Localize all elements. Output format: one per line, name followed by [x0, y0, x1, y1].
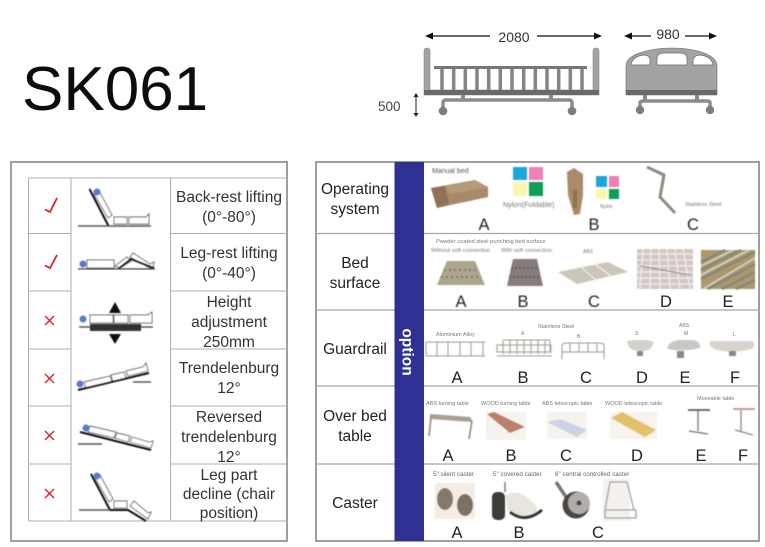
option B: stainless folding rail: A	[521, 331, 525, 337]
option D: wood telescopic table: WOOD telescopic table	[605, 401, 662, 407]
option A: manual bed foldable handle	[431, 167, 555, 234]
option C: central controlled caster: 6" central controlled caster	[555, 471, 629, 478]
row: over bed table	[323, 396, 755, 465]
option C: stainless rail	[562, 334, 604, 387]
row heading: system	[330, 201, 380, 218]
option F: ABS rail large	[710, 332, 754, 387]
label: (0°-40°)	[202, 265, 256, 282]
option D: grid surface	[637, 249, 693, 311]
option vertical band	[394, 162, 424, 541]
option D: ABS rail small: S	[635, 331, 639, 337]
bed side view diagram	[378, 29, 602, 117]
row heading: Caster	[332, 495, 378, 512]
label: Back-rest lifting	[176, 189, 282, 206]
row: caster	[332, 471, 636, 542]
icon: back-rest lifted bed	[78, 188, 151, 226]
row: height adjustment	[45, 294, 268, 351]
length dimension 2080: 2080	[498, 29, 530, 45]
option E: striped surface: E	[722, 293, 734, 311]
bed side drawing	[424, 48, 599, 115]
option F: moveable table	[733, 409, 755, 465]
bed head view diagram	[624, 26, 717, 114]
option C: ABS surface: ABS	[583, 249, 594, 255]
positions table grid	[28, 178, 287, 521]
label: Trendelenburg	[179, 360, 279, 377]
option F: moveable table: F	[738, 447, 748, 465]
icon: leg-rest lifted bed	[78, 253, 155, 269]
option C: stainless steel crank	[647, 167, 721, 234]
row: leg part decline	[45, 467, 275, 522]
option A: surface without soft connection	[431, 248, 490, 311]
option B: covered caster: B	[513, 524, 525, 542]
option B: wood turning table: B	[505, 447, 517, 465]
option A: ABS turning table	[426, 401, 473, 465]
option A: ABS turning table: A	[442, 447, 454, 465]
row heading: table	[338, 428, 372, 445]
cross mark	[45, 431, 54, 440]
option B: nylon handle	[567, 168, 619, 234]
option A: manual bed foldable handle: Manual bed	[432, 168, 469, 175]
option vertical band: option	[398, 328, 416, 376]
width dimension 980: 980	[656, 26, 680, 42]
option E: ABS rail medium: E	[679, 369, 691, 387]
option D: ABS rail small	[627, 331, 653, 387]
panel: bed positions	[11, 162, 287, 541]
height dimension 500: 500	[378, 99, 401, 114]
option A: surface without soft connection: Without soft connection	[431, 248, 490, 254]
row heading: Bed	[341, 255, 369, 272]
option A: surface without soft connection: A	[455, 293, 467, 311]
option C: ABS surface: C	[588, 293, 600, 311]
icon: reversed trendelenburg bed	[78, 424, 153, 450]
option B: covered caster	[492, 471, 542, 542]
option B: stainless folding rail	[497, 331, 552, 387]
option D: ABS rail small: D	[636, 369, 648, 387]
ABS caption: ABS	[679, 323, 690, 329]
check mark	[45, 198, 57, 212]
option D: grid surface: D	[660, 293, 672, 311]
cross mark	[45, 374, 54, 383]
option E: ABS rail medium	[667, 331, 700, 387]
option E: moveable table	[688, 410, 710, 465]
panel: options	[316, 162, 759, 542]
label: position)	[200, 505, 258, 522]
option B: surface with soft connection: B	[517, 293, 529, 311]
option A: aluminium alloy rail: Aluminium Alloy	[436, 332, 475, 338]
label: Leg part	[201, 467, 258, 484]
headboard drawing	[626, 48, 717, 114]
option C: stainless steel crank: C	[687, 216, 699, 234]
option C: ABS telescopic table	[542, 401, 592, 465]
height dimension 500	[378, 93, 418, 117]
label: 12°	[217, 380, 241, 397]
option C: stainless steel crank: Stainless Steel	[685, 202, 721, 208]
option A: aluminium alloy rail	[426, 332, 485, 387]
label: adjustment	[191, 314, 268, 331]
row: leg-rest lifting	[45, 245, 278, 282]
row: trendelenburg	[45, 360, 279, 397]
option F: ABS rail large: L	[733, 332, 736, 338]
length dimension 2080	[425, 29, 602, 45]
row: reversed trendelenburg	[45, 409, 277, 466]
option E: moveable table: E	[695, 447, 707, 465]
bed surface caption: Powder coated steel punching bed surface	[436, 239, 546, 245]
title: SK061	[22, 55, 208, 124]
option A: manual bed foldable handle: Nylon(Foldable)	[503, 200, 555, 209]
row heading: surface	[330, 275, 380, 292]
option B: stainless folding rail: B	[517, 369, 529, 387]
row: back-rest lifting	[45, 188, 282, 226]
cross mark	[45, 489, 54, 498]
row: operating system	[321, 167, 721, 234]
option E: ABS rail medium: M	[684, 331, 688, 337]
label: Reversed	[196, 409, 262, 426]
option D: wood telescopic table	[605, 401, 662, 465]
row heading: Operating	[321, 181, 389, 198]
option F: ABS rail large: F	[730, 369, 740, 387]
option B: covered caster: 5" covered caster	[493, 471, 542, 478]
cross mark	[45, 316, 54, 325]
stainless steel caption: Stainless Steel	[538, 324, 574, 330]
row: bed surface	[330, 239, 755, 311]
label: Height	[207, 294, 252, 311]
option B: surface with soft connection: With soft connection	[501, 248, 552, 254]
option D: wood telescopic table: D	[631, 447, 643, 465]
option E: striped surface	[701, 250, 755, 311]
option A: ABS turning table: ABS turning table	[426, 401, 469, 407]
option B: nylon handle: B	[588, 216, 600, 234]
option A: silent caster: A	[451, 524, 463, 542]
row heading: Over bed	[323, 408, 387, 425]
option C: ABS surface	[558, 249, 628, 311]
label: 12°	[217, 449, 241, 466]
option A: manual bed foldable handle: A	[478, 216, 490, 234]
moveable table caption: Moveable table	[697, 396, 734, 402]
check mark	[45, 255, 57, 268]
option C: ABS telescopic table: ABS telescopic table	[542, 401, 592, 407]
label: trendelenburg	[181, 429, 277, 446]
row: guardrail	[323, 323, 754, 387]
icon: trendelenburg bed	[76, 363, 151, 390]
option C: central controlled caster: C	[592, 524, 604, 542]
row heading: Guardrail	[323, 341, 387, 358]
option B: wood turning table: WOOD turning table	[481, 401, 531, 407]
icon: height adjustment bed	[79, 302, 153, 344]
label: decline (chair	[183, 486, 275, 503]
option C: central controlled caster	[555, 471, 636, 542]
option A: silent caster: 5" silent caster	[433, 471, 474, 478]
option A: silent caster	[433, 471, 475, 542]
option A: aluminium alloy rail: A	[451, 369, 463, 387]
option C: ABS telescopic table: C	[560, 447, 572, 465]
label: (0°-80°)	[202, 209, 256, 226]
option B: nylon handle: Nylon	[600, 204, 613, 210]
label: Leg-rest lifting	[180, 245, 278, 262]
option C: stainless rail: B	[577, 334, 581, 340]
label: 250mm	[203, 334, 255, 351]
option B: surface with soft connection	[501, 248, 552, 311]
icon: chair position bed	[79, 472, 151, 521]
option B: wood turning table	[481, 401, 531, 465]
option C: stainless rail: C	[580, 369, 592, 387]
